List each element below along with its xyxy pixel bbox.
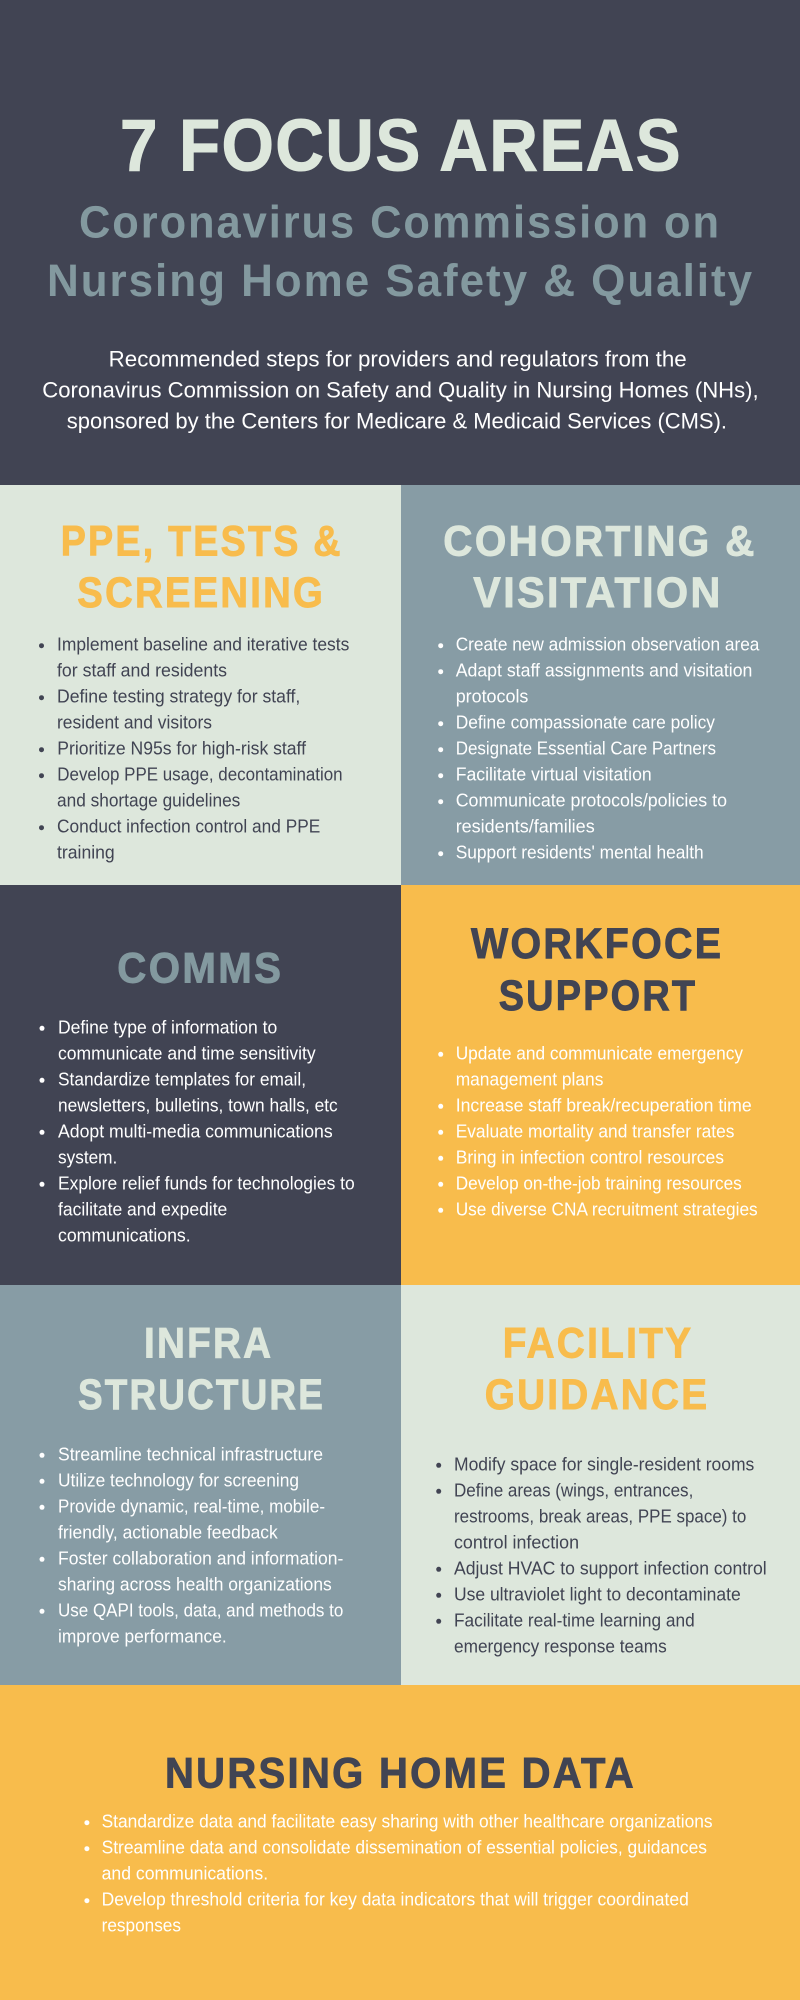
heading — [61, 517, 343, 617]
bullet list — [40, 1443, 343, 1646]
bullet list: and communications. — [102, 1863, 268, 1884]
bullet list: management plans — [456, 1068, 603, 1089]
heading: INFRA — [144, 1319, 273, 1367]
bullet list: Define type of information to — [58, 1016, 277, 1037]
heading: VISITATION — [473, 569, 723, 617]
heading: SUPPORT — [499, 972, 697, 1020]
heading: FACILITY — [503, 1319, 693, 1367]
bullet list: Modify space for single-resident rooms — [454, 1453, 754, 1474]
bullet list: Communicate protocols/policies to — [456, 790, 727, 811]
bullet list: for staff and residents — [57, 660, 227, 681]
bullet list — [436, 1453, 767, 1656]
panel: cohorting and visitation — [401, 485, 800, 885]
bullet list: Adopt multi-media communications — [58, 1120, 333, 1141]
bullet list: responses — [102, 1915, 181, 1936]
bullet list: Develop on-the-job training resources — [456, 1172, 742, 1193]
bullet list: improve performance. — [58, 1625, 227, 1646]
panel background — [401, 885, 800, 1285]
bullet list: sharing across health organizations — [58, 1573, 332, 1594]
bullet list: communications. — [58, 1224, 191, 1245]
panel background — [0, 485, 401, 885]
bullet list: Standardize data and facilitate easy sharing with other healthcare organizations — [102, 1811, 713, 1832]
bullet list: friendly, actionable feedback — [58, 1521, 278, 1542]
heading — [485, 1319, 709, 1419]
bullet list: communicate and time sensitivity — [58, 1042, 316, 1063]
heading: COHORTING & — [443, 517, 757, 565]
panel: infrastructure — [0, 1285, 401, 1685]
subtitle — [47, 196, 754, 306]
panel: PPE, tests and screening — [0, 485, 401, 885]
heading: COMMS — [117, 944, 283, 992]
panel background — [401, 485, 800, 885]
bullet list: Develop threshold criteria for key data indicators that will trigger coordinated — [102, 1889, 689, 1910]
panel: facility guidance — [401, 1285, 800, 1685]
bullet list: Adjust HVAC to support infection control — [454, 1557, 767, 1578]
bullet list: Utilize technology for screening — [58, 1469, 299, 1490]
bullet list: Update and communicate emergency — [456, 1042, 744, 1063]
intro text — [42, 347, 759, 434]
panel background — [0, 1685, 800, 2000]
bullet list: Streamline technical infrastructure — [58, 1443, 323, 1464]
bullet list: facilitate and expedite — [58, 1198, 227, 1219]
intro text: sponsored by the Centers for Medicare & Medicaid Services (CMS). — [67, 409, 727, 434]
bullet list: resident and visitors — [57, 712, 212, 733]
heading — [471, 920, 723, 1020]
intro text: Recommended steps for providers and regulators from the — [109, 347, 687, 372]
panel: comms — [0, 885, 401, 1285]
bullet list: Define testing strategy for staff, — [57, 686, 300, 707]
bullet list: newsletters, bulletins, town halls, etc — [58, 1094, 338, 1115]
bullet list: and shortage guidelines — [57, 790, 240, 811]
bullet list: Use ultraviolet light to decontaminate — [454, 1583, 741, 1604]
bullet list: Evaluate mortality and transfer rates — [456, 1120, 734, 1141]
bullet list: restrooms, break areas, PPE space) to — [454, 1505, 746, 1526]
heading: WORKFOCE — [471, 920, 723, 968]
bullet list: Explore relief funds for technologies to — [58, 1172, 355, 1193]
heading: PPE, TESTS & — [61, 517, 343, 565]
bullet list: Provide dynamic, real-time, mobile- — [58, 1495, 325, 1516]
bullet list: control infection — [454, 1531, 579, 1552]
intro text: Coronavirus Commission on Safety and Quality in Nursing Homes (NHs), — [42, 377, 759, 402]
bullet list: Define areas (wings, entrances, — [454, 1479, 693, 1500]
bullet list: Define compassionate care policy — [456, 712, 716, 733]
bullet list — [438, 634, 760, 863]
bullet list: training — [57, 842, 115, 863]
bullet list: Develop PPE usage, decontamination — [57, 764, 343, 785]
bullet list — [39, 634, 349, 863]
panel: nursing home data — [0, 1685, 800, 2000]
bullet list — [84, 1811, 713, 1936]
bullet list — [438, 1042, 758, 1219]
title: 7 FOCUS AREAS — [120, 104, 682, 187]
heading: STRUCTURE — [78, 1371, 325, 1419]
heading: GUIDANCE — [485, 1371, 709, 1419]
panel: header — [0, 0, 800, 485]
heading: NURSING HOME DATA — [165, 1749, 636, 1797]
subtitle: Nursing Home Safety & Quality — [47, 255, 754, 306]
bullet list: Adapt staff assignments and visitation — [456, 660, 752, 681]
bullet list: protocols — [456, 686, 528, 707]
heading: SCREENING — [77, 569, 325, 617]
bullet list: Implement baseline and iterative tests — [57, 634, 349, 655]
heading — [443, 517, 757, 617]
bullet list: Increase staff break/recuperation time — [456, 1094, 752, 1115]
bullet list: Support residents' mental health — [456, 842, 704, 863]
bullet list — [40, 1016, 355, 1245]
bullet list: Prioritize N95s for high-risk staff — [57, 738, 307, 759]
panel: workforce support — [401, 885, 800, 1285]
panel background — [0, 885, 401, 1285]
bullet list: Use QAPI tools, data, and methods to — [58, 1599, 343, 1620]
bullet list: Facilitate virtual visitation — [456, 764, 652, 785]
bullet list: Create new admission observation area — [456, 634, 760, 655]
bullet list: Use diverse CNA recruitment strategies — [456, 1198, 758, 1219]
bullet list: Standardize templates for email, — [58, 1068, 306, 1089]
bullet list: Facilitate real-time learning and — [454, 1609, 695, 1630]
bullet list: Streamline data and consolidate dissemination of essential policies, guidances — [102, 1837, 707, 1858]
bullet list: Designate Essential Care Partners — [456, 738, 716, 759]
bullet list: Bring in infection control resources — [456, 1146, 724, 1167]
bullet list: Conduct infection control and PPE — [57, 816, 320, 837]
panel background — [0, 1285, 401, 1685]
bullet list: residents/families — [456, 816, 595, 837]
header background — [0, 0, 800, 485]
heading — [78, 1319, 325, 1419]
panel background — [401, 1285, 800, 1685]
bullet list: system. — [58, 1146, 117, 1167]
bullet list: emergency response teams — [454, 1635, 667, 1656]
bullet list: Foster collaboration and information- — [58, 1547, 343, 1568]
subtitle: Coronavirus Commission on — [79, 196, 721, 247]
